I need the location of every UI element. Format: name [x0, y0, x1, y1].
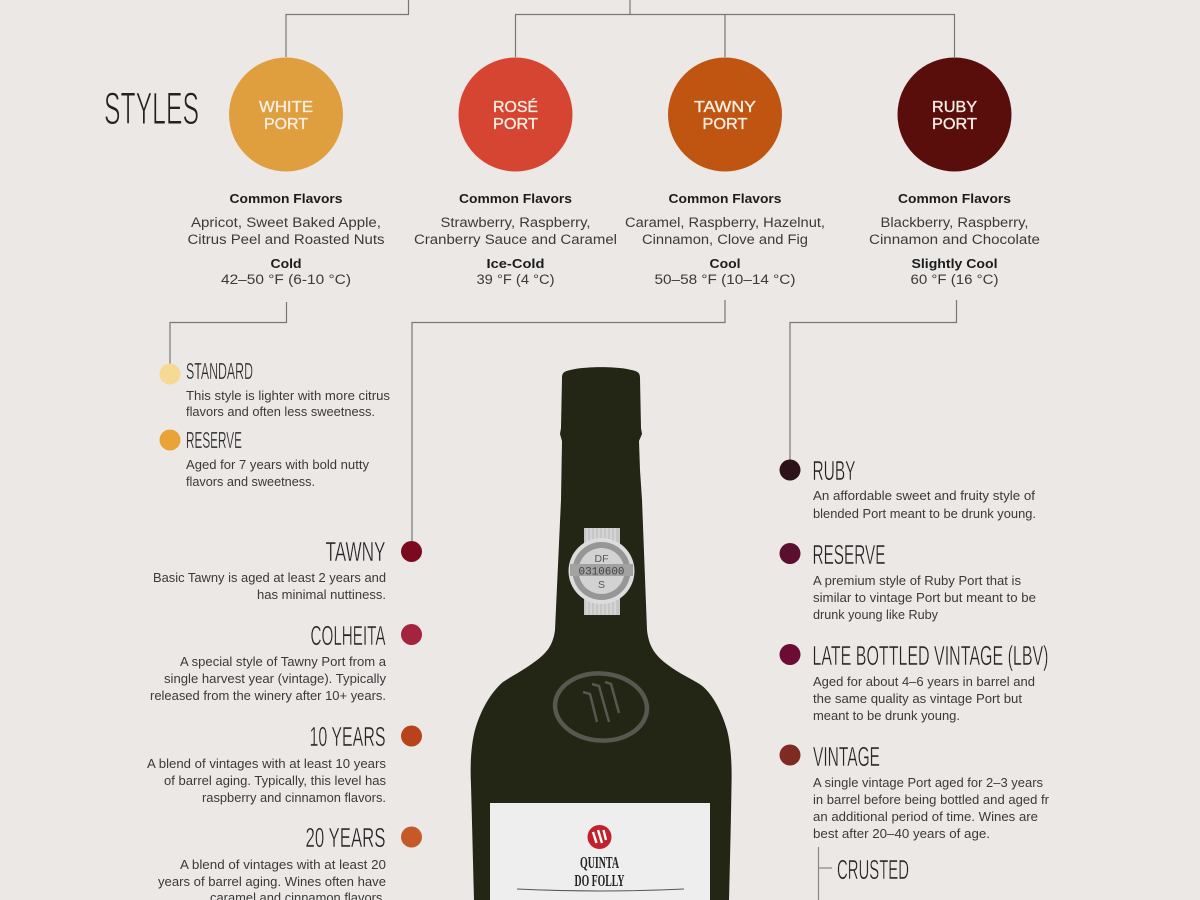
item: late bottled vintage [780, 640, 1048, 723]
tax stamp [568, 528, 634, 615]
item: ruby: blended Port meant to be drunk young. [813, 507, 1036, 521]
tax stamp: DF [594, 553, 608, 565]
flavors and temperature: white port: Citrus Peel and Roasted Nuts [188, 232, 385, 247]
item: vintage: VINTAGE [813, 741, 880, 772]
tax stamp: 0310600 [578, 566, 624, 578]
item: 10 years: A blend of vintages with at least 10 years [147, 757, 386, 771]
flavors and temperature: rose port: Ice-Cold [486, 256, 545, 271]
flavors and temperature: rose port: Strawberry, Raspberry, [440, 215, 590, 230]
circle: rose port: ROSÉ [493, 97, 538, 116]
label wordmark: DO FOLLY [574, 871, 624, 890]
circle: white port: WHITE [259, 99, 313, 116]
flavors and temperature: ruby port: Slightly Cool [912, 256, 998, 271]
item: reserve: flavors and sweetness. [186, 475, 315, 489]
panel: tawny substyles [147, 536, 422, 900]
panel: ruby substyles [780, 455, 1049, 885]
item: vintage: an additional period of time. Wines are [813, 810, 1038, 824]
item: late bottled vintage: meant to be drunk young. [813, 709, 960, 723]
item: tawny [153, 536, 422, 602]
flavors and temperature: tawny port: 50–58 °F (10–14 °C) [654, 272, 796, 287]
item: reserve [160, 427, 370, 489]
item: reserve: A premium style of Ruby Port that is [813, 574, 1021, 588]
item: standard: STANDARD [186, 358, 253, 384]
item: reserve: drunk young like Ruby [813, 608, 939, 622]
panel: ruby port [869, 58, 1040, 287]
item: 20 years: A blend of vintages with at least 20 [180, 858, 386, 872]
item: tawny: Basic Tawny is aged at least 2 years and [153, 571, 386, 585]
item: vintage [780, 741, 1049, 841]
flavors and temperature: rose port [414, 191, 617, 287]
label logo [588, 825, 612, 849]
item: 10 years: raspberry and cinnamon flavors. [202, 791, 386, 805]
circle: ruby port: RUBY [932, 99, 977, 116]
item: reserve [780, 539, 1036, 622]
item: vintage: in barrel before being bottled and aged fr [813, 793, 1049, 807]
circle: ruby port: PORT [932, 116, 977, 133]
label wordmark [574, 853, 624, 890]
item: tawny: has minimal nuttiness. [257, 588, 386, 602]
flavors and temperature: ruby port: Blackberry, Raspberry, [880, 215, 1028, 230]
item: 10 years: of barrel aging. Typically, this level has [164, 774, 386, 788]
item: ruby: RUBY [812, 455, 856, 486]
flavors and temperature: ruby port: Cinnamon and Chocolate [869, 232, 1040, 247]
flavors and temperature: ruby port [869, 191, 1040, 287]
bottle illustration [471, 367, 732, 900]
flavors and temperature: rose port: Common Flavors [459, 191, 572, 206]
flavors and temperature: ruby port: 60 °F (16 °C) [910, 272, 998, 287]
flavors and temperature: white port: Apricot, Sweet Baked Apple, [191, 215, 381, 230]
flavors and temperature: ruby port: Common Flavors [898, 191, 1011, 206]
item: colheita [150, 620, 422, 703]
item: colheita: released from the winery after 10+ years. [150, 689, 386, 703]
circle: tawny port [668, 58, 782, 172]
item: vintage: A single vintage Port aged for 2–3 years [813, 776, 1043, 790]
item: colheita: single harvest year (vintage). Typically [164, 672, 387, 686]
item: late bottled vintage: the same quality as vintage Port but [813, 692, 1023, 706]
circle: white port: PORT [264, 116, 308, 133]
circle: white port [229, 58, 343, 172]
circle: rose port [458, 58, 572, 172]
item: colheita: A special style of Tawny Port from a [180, 655, 386, 669]
item: vintage: best after 20–40 years of age. [813, 827, 990, 841]
panel: rose port [414, 58, 617, 287]
item: 10 years [147, 721, 422, 805]
flavors and temperature: rose port: 39 °F (4 °C) [476, 272, 554, 287]
item: tawny: TAWNY [326, 536, 386, 567]
item: colheita: COLHEITA [310, 620, 386, 651]
flavors and temperature: white port: 42–50 °F (6-10 °C) [221, 272, 351, 287]
item: 20 years: years of barrel aging. Wines often have [158, 875, 386, 889]
item: ruby: An affordable sweet and fruity style of [813, 489, 1036, 503]
item: reserve: Aged for 7 years with bold nutty [186, 458, 370, 472]
tax stamp: S [598, 579, 605, 591]
item: reserve: similar to vintage Port but meant to be [813, 591, 1036, 605]
item: standard: This style is lighter with more citrus [186, 389, 390, 403]
bottle silhouette [471, 367, 732, 900]
circle: tawny port: TAWNY [694, 99, 756, 116]
item: ruby [780, 455, 1036, 521]
panel: tawny port [625, 58, 825, 287]
flavors and temperature: white port [188, 191, 385, 287]
item: standard [160, 358, 390, 419]
bottle label [490, 803, 710, 900]
flavors and temperature: tawny port: Common Flavors [668, 191, 782, 206]
flavors and temperature: tawny port [625, 191, 825, 287]
item: reserve: RESERVE [812, 539, 886, 570]
circle: tawny port: PORT [702, 116, 748, 133]
flavors and temperature: tawny port: Caramel, Raspberry, Hazelnut, [625, 215, 825, 230]
item: 10 years: 10 YEARS [310, 721, 386, 752]
panel: white port [188, 58, 385, 287]
panel: white port substyles [160, 358, 390, 489]
item: 20 years: 20 YEARS [306, 822, 386, 853]
circle: ruby port [898, 58, 1012, 172]
flavors and temperature: white port: Common Flavors [230, 191, 342, 206]
label wordmark: QUINTA [580, 853, 619, 872]
item: late bottled vintage: Aged for about 4–6 years in barrel and [813, 675, 1035, 689]
flavors and temperature: rose port: Cranberry Sauce and Caramel [414, 232, 617, 247]
flavors and temperature: white port: Cold [270, 256, 302, 271]
item: reserve: RESERVE [186, 427, 242, 453]
flavors and temperature: tawny port: Cool [710, 256, 740, 271]
heading: styles: STYLES [104, 83, 199, 134]
item: 20 years [158, 822, 422, 900]
circle: rose port: PORT [493, 116, 538, 133]
item: standard: flavors and often less sweetness. [186, 405, 375, 419]
item: crusted: CRUSTED [837, 854, 909, 885]
embossed logo [553, 670, 649, 744]
flavors and temperature: tawny port: Cinnamon, Clove and Fig [642, 232, 808, 247]
